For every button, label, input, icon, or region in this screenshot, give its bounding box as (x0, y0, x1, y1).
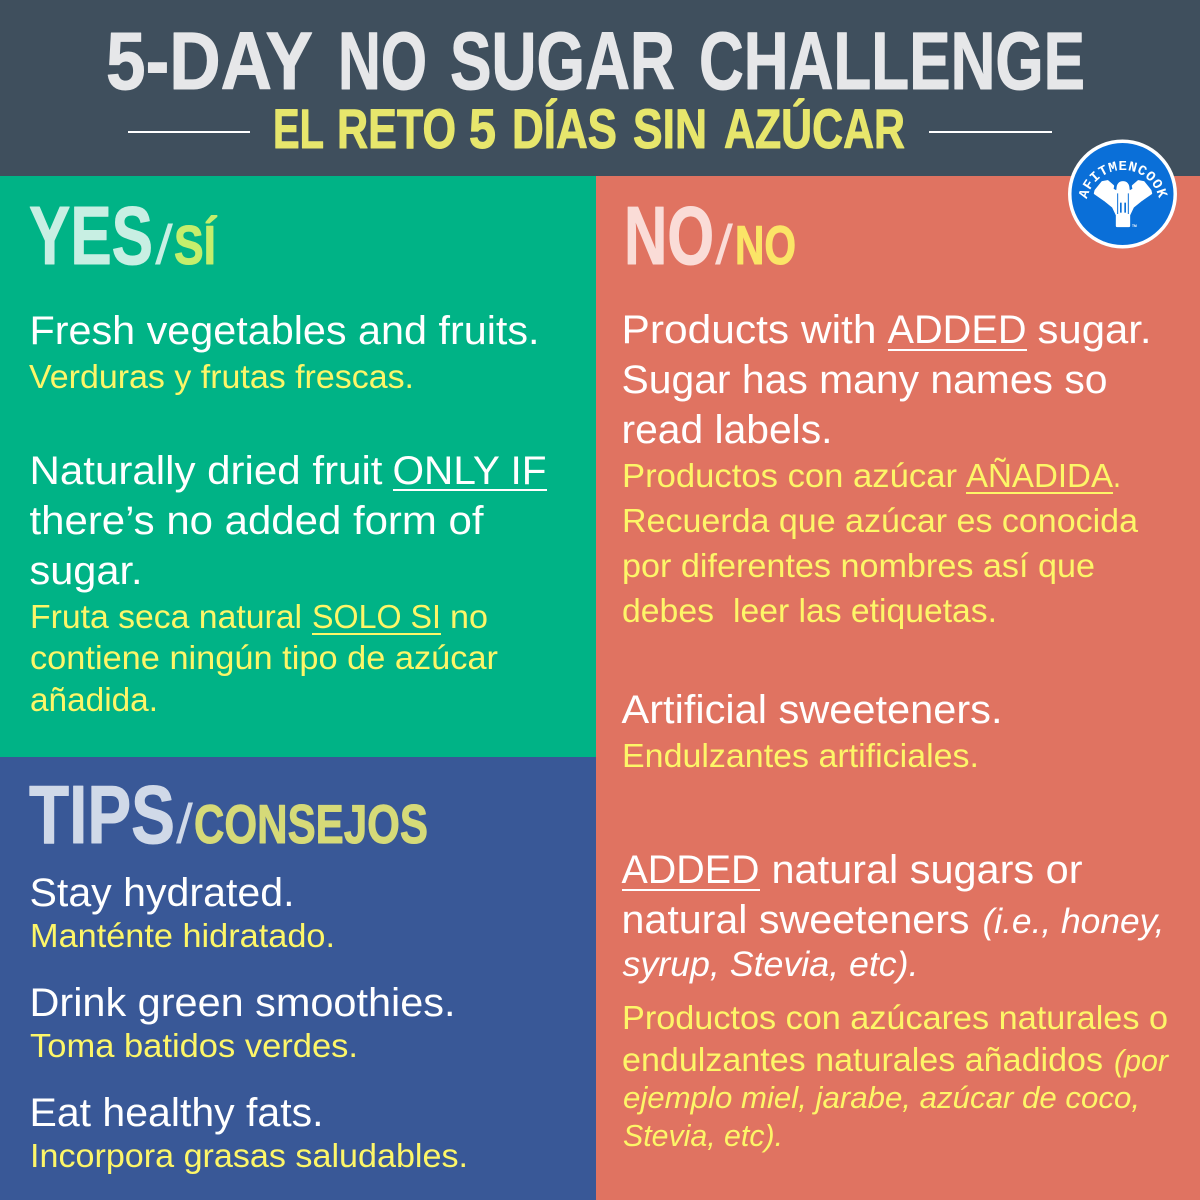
text block: fresh vegetables (29, 309, 540, 396)
text block: artificial sweeteners: Endulzantes artificiales. (622, 738, 979, 775)
icon: afitmencook logo: AFITMENCOOK (1078, 161, 1168, 200)
text block: dried fruit spanish: contiene ningún tipo de azúcar (30, 640, 498, 677)
heading: tips (29, 768, 428, 861)
tip: green smoothies (30, 981, 456, 1065)
text block: dried fruit spanish: no (450, 599, 488, 636)
tip: stay hydrated: Stay hydrated. (30, 871, 294, 915)
title: 5-DAY (106, 16, 313, 107)
text block: added sugar english: Products with (622, 308, 876, 352)
tip: stay hydrated: Manténte hidratado. (30, 918, 335, 955)
heading: no: NO (735, 214, 796, 276)
subtitle: DÍAS (512, 97, 617, 160)
subtitle: EL (273, 97, 324, 160)
text block: dried fruit spanish: añadida. (30, 682, 158, 719)
subtitle: RETO (337, 97, 456, 160)
text block: dried fruit english: there’s no added form of (30, 499, 484, 543)
text block: natural sugars spanish: Productos con azúcares naturales o (622, 1000, 1168, 1037)
text block: natural sugars english: natural sugars or (772, 848, 1082, 892)
text block: natural sugars english: ADDED (622, 848, 760, 892)
text block: natural sugars spanish: Stevia, etc). (623, 1118, 783, 1153)
tip: green smoothies: Toma batidos verdes. (30, 1028, 358, 1065)
heading: tips: TIPS (29, 768, 175, 861)
panel: tips (0, 757, 596, 1200)
text block: natural sugars english (622, 848, 1164, 984)
text block: dried fruit spanish: Fruta seca natural (30, 599, 302, 636)
tip: green smoothies: Drink green smoothies. (30, 981, 456, 1025)
text block: artificial sweeteners: Artificial sweeteners. (622, 688, 1002, 732)
panel: yes (0, 176, 596, 757)
text block: added sugar english: read labels. (622, 408, 832, 452)
text block: fresh vegetables: Fresh vegetables and fruits. (30, 309, 540, 353)
tip: healthy fats: Eat healthy fats. (30, 1091, 324, 1135)
text block: added sugar english (622, 308, 1152, 452)
panel: header (0, 0, 1200, 176)
panel: no (596, 176, 1200, 1200)
text block: added sugar spanish: Recuerda que azúcar es conocida (622, 503, 1138, 540)
title: CHALLENGE (699, 16, 1085, 107)
text block: natural sugars english: syrup, Stevia, etc). (622, 945, 918, 984)
text block: added sugar spanish: leer las etiquetas. (733, 593, 997, 630)
text block: added sugar english: Sugar has many names so (622, 358, 1108, 402)
heading: yes: / (155, 213, 174, 276)
text block: added sugar english: ADDED (888, 308, 1026, 352)
subtitle: AZÚCAR (724, 97, 905, 160)
text block: dried fruit english (30, 449, 547, 593)
text block: natural sugars spanish: ejemplo miel, jarabe, azúcar de coco, (623, 1080, 1140, 1115)
text block: natural sugars english: natural sweeteners (622, 898, 970, 942)
title: NO (338, 16, 427, 107)
heading: tips: / (176, 792, 193, 855)
text block: dried fruit spanish (30, 599, 498, 719)
text block: added sugar spanish: AÑADIDA (966, 457, 1114, 495)
tip: healthy fats (30, 1091, 468, 1175)
text block: dried fruit english: sugar. (30, 549, 142, 593)
tip: stay hydrated (30, 871, 335, 955)
text block: natural sugars spanish: endulzantes naturales añadidos (622, 1042, 1103, 1079)
heading: no: NO (624, 189, 714, 282)
title: SUGAR (450, 16, 675, 107)
text block: artificial sweeteners (622, 688, 1002, 775)
text block: dried fruit spanish: SOLO SI (312, 599, 441, 636)
title (106, 16, 1085, 107)
text block: fresh vegetables: Verduras y frutas frescas. (29, 359, 414, 396)
text block: natural sugars english: (i.e., honey, (982, 902, 1164, 941)
text block: added sugar spanish (622, 457, 1138, 630)
subtitle: SIN (633, 97, 707, 160)
text block: added sugar english: sugar. (1038, 308, 1152, 352)
text block: added sugar spanish: . (1113, 458, 1121, 495)
subtitle: 5 (469, 97, 496, 160)
heading: no: / (715, 213, 734, 276)
text block: natural sugars spanish: (por (1114, 1043, 1170, 1078)
heading: yes: YES (29, 189, 153, 282)
text block: dried fruit english: Naturally dried fruit (30, 449, 382, 493)
text block: added sugar spanish: por diferentes nombres así que (622, 548, 1095, 585)
text block: dried fruit english: ONLY IF (392, 449, 546, 493)
icon: afitmencook logo (1068, 140, 1177, 248)
heading: yes: SÍ (174, 214, 217, 276)
subtitle (273, 97, 905, 160)
icon: afitmencook logo: TM (1132, 224, 1137, 228)
tip: healthy fats: Incorpora grasas saludables. (30, 1138, 468, 1175)
text block: added sugar spanish: debes (622, 593, 714, 630)
text block: added sugar spanish: Productos con azúcar (622, 458, 957, 495)
text block: natural sugars spanish (622, 1000, 1170, 1153)
heading: tips: CONSEJOS (194, 793, 428, 855)
